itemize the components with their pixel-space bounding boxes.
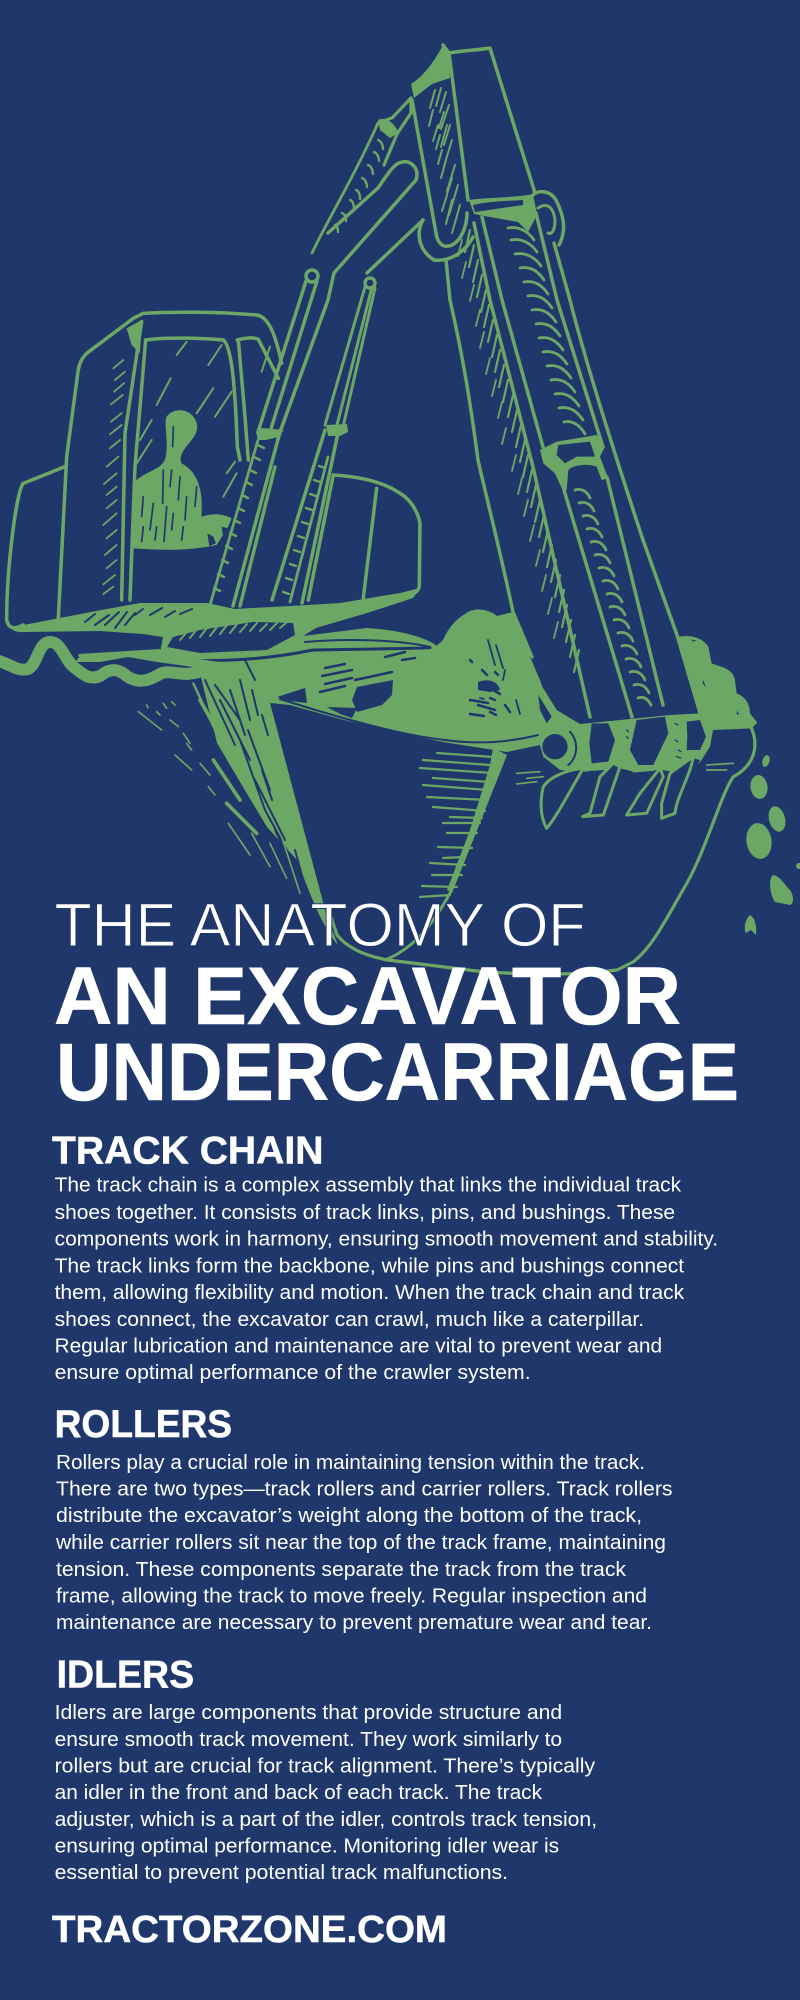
title line 2: AN EXCAVATOR: [54, 951, 681, 1042]
panel: track chain: [52, 1129, 718, 1384]
title line 1: THE ANATOMY OF: [54, 891, 586, 959]
body: track chain: shoes connect, the excavator can crawl, much like a caterpillar.: [55, 1309, 644, 1331]
body: rollers: [55, 1452, 672, 1634]
heading: rollers: ROLLERS: [55, 1403, 232, 1446]
body: track chain: ensure optimal performance of the crawler system.: [55, 1362, 531, 1384]
body: rollers: distribute the excavator’s weight along the bottom of the track,: [56, 1505, 642, 1527]
soil specks left of bucket: [138, 683, 300, 893]
body: idlers: rollers but are crucial for track alignment. There’s typically: [55, 1756, 595, 1778]
operator silhouette: [132, 410, 232, 550]
body: rollers: maintenance are necessary to prevent premature wear and tear.: [56, 1612, 652, 1634]
body: idlers: essential to prevent potential track malfunctions.: [55, 1862, 508, 1884]
illustration: excavator: [0, 45, 800, 974]
body: rollers: Rollers play a crucial role in maintaining tension within the track.: [56, 1452, 645, 1474]
title: [54, 891, 739, 1118]
body: track chain: Regular lubrication and maintenance are vital to prevent wear and: [55, 1336, 662, 1358]
soil droplets: [744, 754, 800, 935]
boom collar and hinge: [367, 192, 564, 273]
body: idlers: [55, 1702, 597, 1884]
body: track chain: them, allowing flexibility and motion. When the track chain and track: [55, 1282, 685, 1304]
body: track chain: The track chain is a complex assembly that links the individual track: [55, 1175, 682, 1197]
body: track chain: shoes together. It consists of track links, pins, and bushings. These: [55, 1202, 675, 1224]
cylinder collar: [540, 435, 608, 492]
body: track chain: The track links form the backbone, while pins and bushings connect: [55, 1256, 685, 1278]
body: rollers: There are two types—track rollers and carrier rollers. Track rollers: [56, 1479, 672, 1501]
undercarriage base and track frame: [9, 588, 437, 668]
body: rollers: frame, allowing the track to move freely. Regular inspection and: [56, 1585, 647, 1607]
panel: rollers: [55, 1403, 673, 1634]
panel: idlers: [55, 1654, 597, 1884]
boom upper section: [411, 45, 535, 233]
arm cylinder upper: [312, 98, 417, 273]
bucket linkage: [517, 657, 733, 784]
right dirt clump: [678, 636, 757, 730]
heading: idlers: IDLERS: [57, 1654, 194, 1697]
body: rollers: while carrier rollers sit near the top of the track frame, maintaining: [55, 1532, 666, 1554]
bucket outline: [327, 725, 755, 974]
body: idlers: ensuring optimal performance. Monitoring idler wear is: [55, 1836, 559, 1858]
boom lower and arm lines: [446, 213, 700, 717]
struts and pins: [210, 270, 375, 606]
track wave: [0, 642, 233, 681]
title line 3: UNDERCARRIAGE: [56, 1027, 739, 1118]
body: rollers: tension. These components separate the track from the track: [56, 1559, 627, 1581]
dirt mass and bucket wedge: [138, 610, 560, 945]
body: idlers: adjuster, which is a part of the idler, controls track tension,: [55, 1809, 597, 1831]
body: idlers: an idler in the front and back of each track. The track: [55, 1782, 543, 1804]
body: idlers: ensure smooth track movement. They work similarly to: [55, 1729, 562, 1751]
footer: source: TRACTORZONE.COM: [52, 1909, 447, 1951]
body: track chain: components work in harmony, ensuring smooth movement and stability.: [55, 1229, 718, 1251]
heading: track chain: TRACK CHAIN: [52, 1129, 324, 1172]
body: track chain: [55, 1175, 718, 1384]
cab and rear body: [7, 312, 420, 628]
body: idlers: Idlers are large components that provide structure and: [55, 1702, 562, 1724]
bucket teeth: [541, 757, 693, 828]
